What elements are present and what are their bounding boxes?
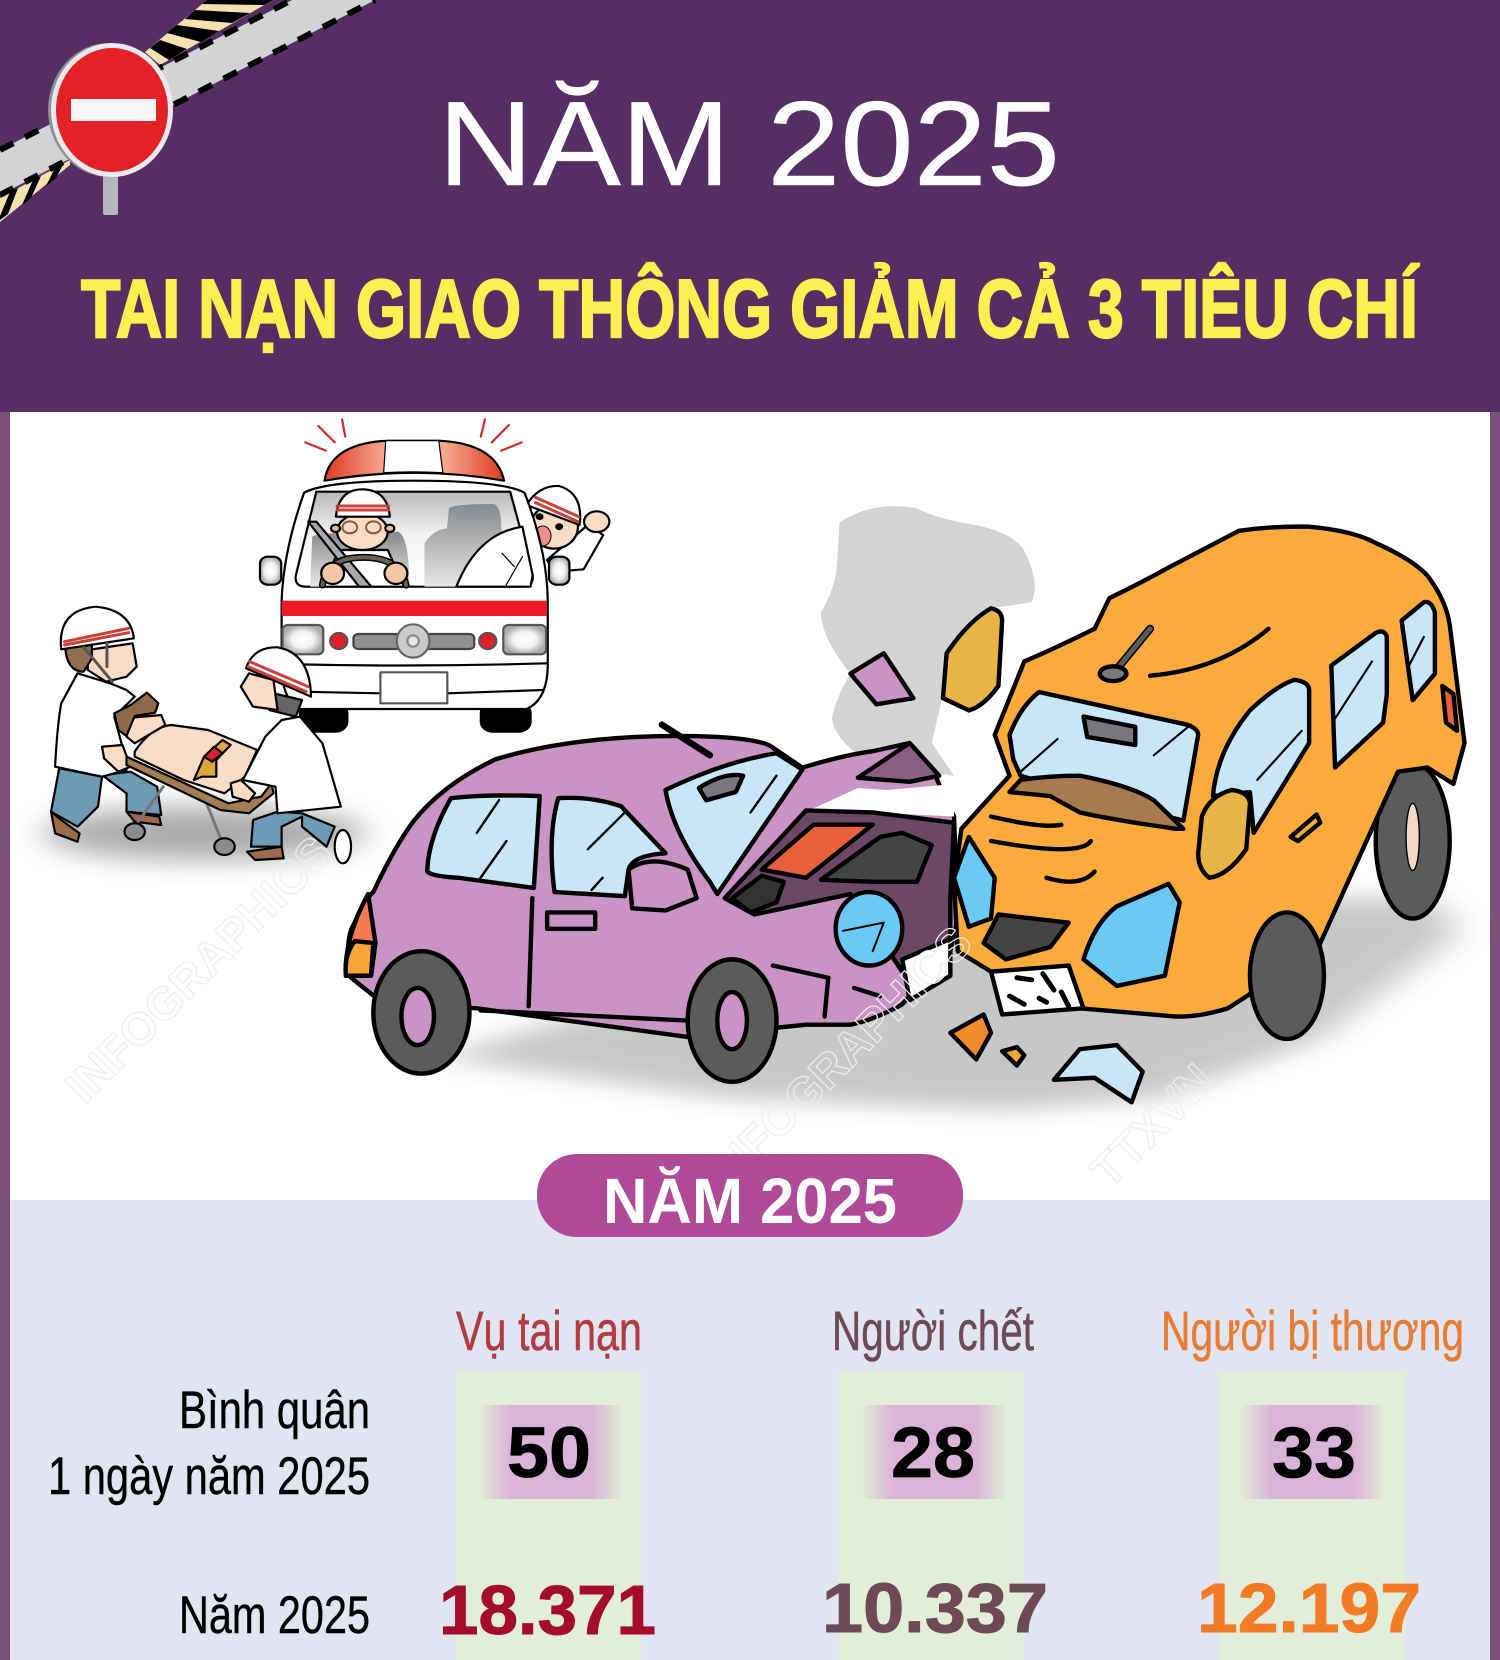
watermark: INFOGRAPHICS [695,916,981,1202]
yearly values: 10.337 [822,1569,1048,1647]
year pill [537,1154,963,1237]
column backgrounds [456,1371,1405,1660]
paramedic right [231,647,351,863]
year pill: NĂM 2025 [603,1165,897,1237]
yearly values: 18.371 [439,1571,656,1649]
daily values: 33 [1272,1414,1356,1493]
header band [0,0,1500,412]
illustration: ambulance and paramedics [41,419,609,863]
shadow under stretcher [41,807,367,860]
daily values: 28 [891,1414,975,1493]
panel: illustration background [10,412,1490,1202]
title: NĂM 2025 [438,77,1060,211]
yearly values: 12.197 [1197,1569,1421,1647]
illustration: car crash [346,506,1464,1110]
row label: daily average: Bình quân [179,1381,370,1440]
column headers: Vụ tai nạn [456,1299,642,1362]
purple car [346,725,958,1082]
icon: road with barrier [0,0,375,222]
panel: statistics background [10,1200,1490,1660]
paramedic left [51,607,161,842]
watermark: TTXVN [1080,1054,1224,1197]
icon: no entry sign [48,43,173,215]
row label: year 2025: Năm 2025 [179,1586,370,1645]
daily values: 50 [507,1414,591,1493]
column headers: Người chết [832,1299,1034,1362]
row label: daily average [48,1381,370,1506]
debris [850,608,1143,1102]
daily values [478,1405,1386,1499]
yearly values [439,1569,1421,1649]
watermark: INFOGRAPHICS [55,826,341,1112]
smoke and ground shadow [436,506,1457,1110]
row label: daily average: 1 ngày năm 2025 [48,1447,370,1506]
column headers [456,1299,1464,1362]
patient on stretcher [114,693,273,855]
ambulance [260,419,609,732]
yellow car [954,527,1464,1039]
watermark [55,826,1224,1202]
